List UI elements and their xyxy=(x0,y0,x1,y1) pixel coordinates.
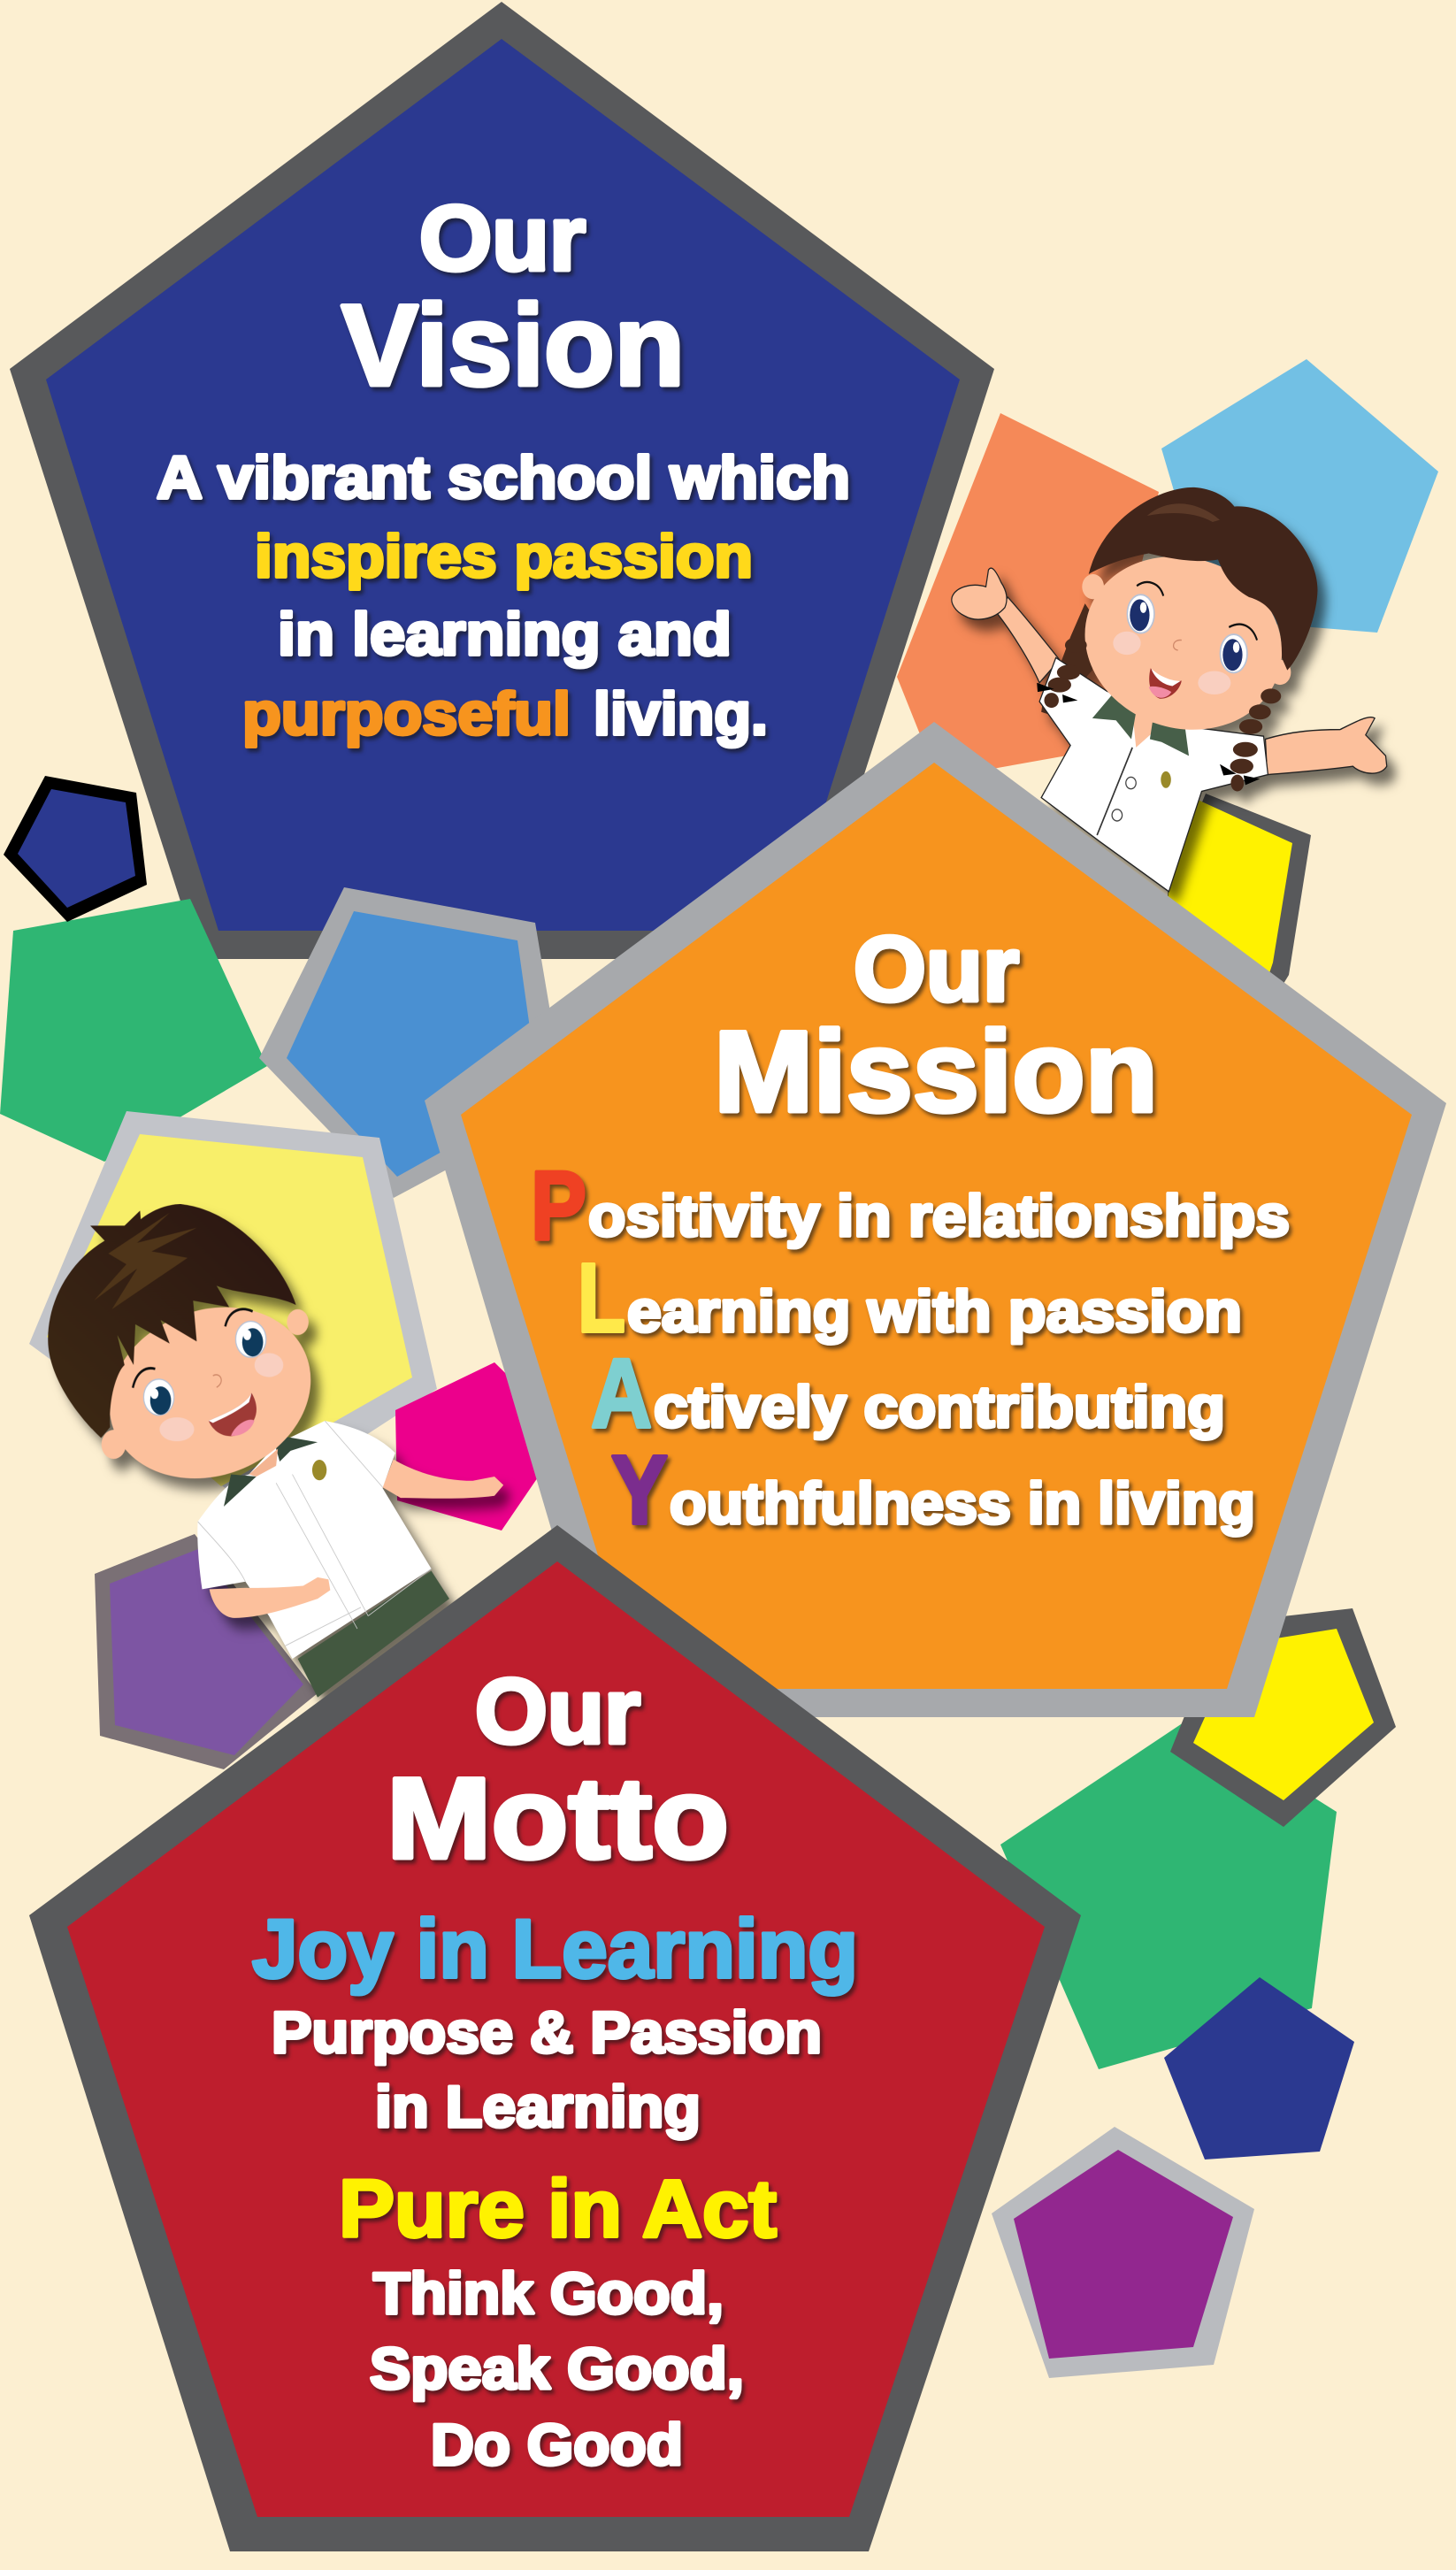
text block: motto xyxy=(252,1661,858,2477)
decorative pentagon: light blue xyxy=(1161,359,1438,633)
panel: mission pentagon xyxy=(425,722,1446,1717)
decorative pentagon: pale yellow with grey border xyxy=(29,1111,437,1508)
heading: Our Mission: Mission xyxy=(714,1007,1158,1136)
heading: Our Vision: Vision xyxy=(341,280,685,410)
text block: vision xyxy=(157,188,850,748)
motto part two: Pure in Act xyxy=(339,2164,777,2477)
motto part one: Joy in Learning: in Learning xyxy=(375,2074,701,2139)
PLAY acronym list: ctively contributing xyxy=(654,1374,1225,1439)
vision statement: in learning and xyxy=(278,601,732,668)
decorative pentagon: magenta xyxy=(395,1362,548,1530)
PLAY acronym list: P xyxy=(531,1152,586,1261)
vision statement: purposeful xyxy=(242,680,571,748)
heading: Our Mission xyxy=(714,918,1158,1136)
motto part two: Pure in Act: Do Good xyxy=(431,2412,683,2477)
PLAY acronym list: L xyxy=(578,1244,625,1353)
vision statement: inspires passion xyxy=(255,523,753,590)
decorative pentagon: salmon xyxy=(897,413,1159,779)
motto part two: Pure in Act: Think Good, xyxy=(373,2260,724,2326)
heading: Our Vision: Our xyxy=(419,188,586,290)
decorative pentagon: green left xyxy=(0,899,267,1162)
panel: motto pentagon xyxy=(29,1525,1081,2551)
heading: Our Motto: Our xyxy=(475,1661,640,1763)
PLAY acronym list: earning with passion xyxy=(627,1278,1242,1344)
PLAY acronym list: ositivity in relationships xyxy=(588,1183,1290,1248)
illustration: girl with open arms xyxy=(952,487,1387,892)
PLAY acronym list: A xyxy=(591,1339,652,1448)
decorative pentagon: navy with black border xyxy=(4,776,147,922)
decorative pentagon: green lower right xyxy=(1000,1719,1337,2069)
PLAY acronym list xyxy=(531,1152,1290,1545)
heading: Our Motto: Motto xyxy=(387,1753,729,1883)
heading: Our Motto xyxy=(387,1661,729,1883)
motto part one: Joy in Learning: Purpose & Passion xyxy=(272,1999,822,2065)
heading: Our Vision xyxy=(341,188,685,410)
motto part one: Joy in Learning: Joy in Learning xyxy=(252,1902,858,1995)
motto part two: Pure in Act: Speak Good, xyxy=(370,2336,744,2401)
motto part one: Joy in Learning xyxy=(252,1902,858,2139)
PLAY acronym list: Y xyxy=(611,1436,668,1545)
vision statement: living. xyxy=(594,680,768,748)
PLAY acronym list: outhfulness in living xyxy=(670,1470,1255,1536)
vision statement: A vibrant school which xyxy=(157,444,850,511)
panel: vision pentagon xyxy=(10,2,994,959)
text block: mission xyxy=(531,918,1290,1545)
decorative pentagon: purple with grey border lower right xyxy=(992,2127,1254,2378)
decorative pentagon: yellow with dark border lower right xyxy=(1170,1608,1396,1827)
heading: Our Mission: Our xyxy=(854,918,1019,1021)
decorative pentagon: purple with grey border xyxy=(95,1534,318,1769)
decorative pentagon: yellow with dark border behind girl xyxy=(1168,794,1311,1000)
decorative pentagon: navy lower right xyxy=(1164,1977,1354,2160)
decorative pentagon: blue with grey border xyxy=(259,887,566,1198)
vision statement xyxy=(157,444,850,748)
illustration: boy pointing xyxy=(48,1204,503,1698)
motto part two: Pure in Act: Pure in Act xyxy=(339,2164,777,2254)
